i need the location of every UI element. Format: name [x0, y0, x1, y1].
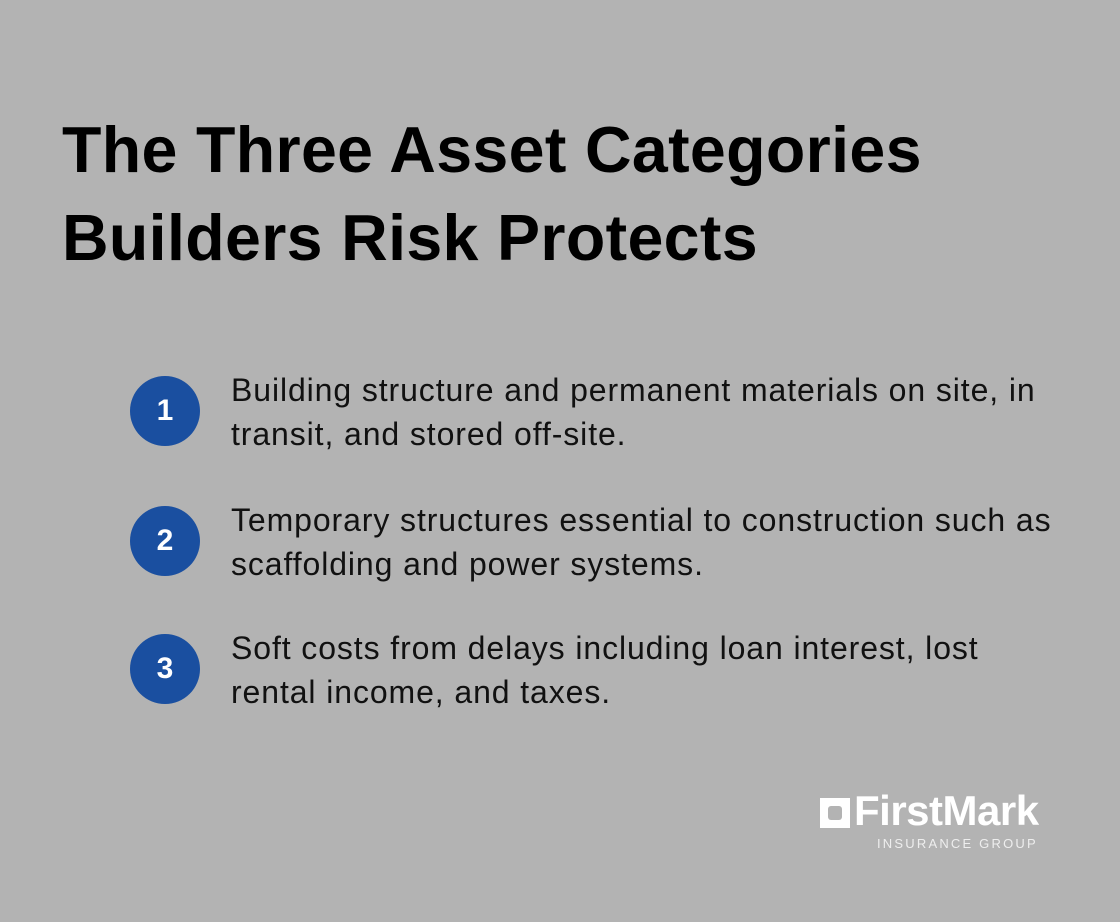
badge 2: 2	[157, 524, 173, 557]
logo text: FirstMark	[854, 787, 1039, 834]
text 1: transit, and stored off-site.	[231, 416, 626, 452]
logo	[820, 787, 1039, 851]
text 3	[231, 630, 979, 710]
badge 2	[130, 506, 200, 576]
badge 3: 3	[157, 652, 173, 685]
text 2	[231, 502, 1052, 582]
text 3: rental income, and taxes.	[231, 674, 611, 710]
text 2: Temporary structures essential to construction such as	[231, 502, 1052, 538]
badge 3	[130, 634, 200, 704]
text 2: scaffolding and power systems.	[231, 546, 704, 582]
item 2	[130, 502, 1052, 582]
title: The Three Asset Categories	[62, 114, 922, 186]
item 1	[130, 372, 1036, 452]
title: Builders Risk Protects	[62, 202, 758, 274]
item 3	[130, 630, 979, 710]
icon: logo square	[820, 798, 850, 828]
text 3: Soft costs from delays including loan interest, lost	[231, 630, 979, 666]
logo subtitle: INSURANCE GROUP	[877, 836, 1038, 851]
title	[62, 114, 922, 274]
badge 1	[130, 376, 200, 446]
text 1: Building structure and permanent materials on site, in	[231, 372, 1036, 408]
text 1	[231, 372, 1036, 452]
badge 1: 1	[157, 394, 173, 427]
